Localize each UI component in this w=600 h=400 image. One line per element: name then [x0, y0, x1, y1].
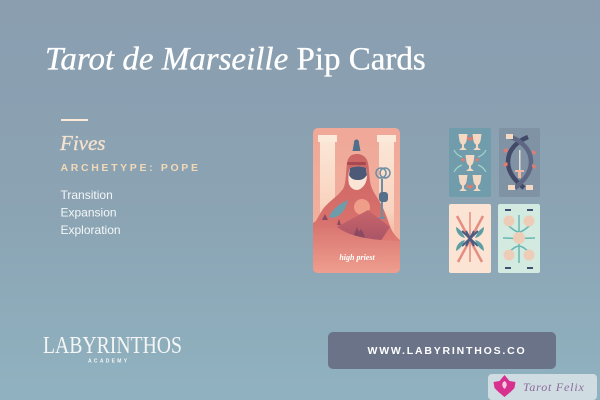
- card label: high priest: [339, 253, 375, 262]
- keyhole ornament: [352, 140, 360, 151]
- face mask and beard: [348, 166, 367, 190]
- text block: fives archetype: Transition: [60, 188, 113, 202]
- trees: [322, 214, 341, 225]
- columns: [318, 135, 396, 242]
- card: cups: [449, 128, 491, 197]
- text block: fives archetype: Exploration: [60, 223, 121, 237]
- card: wands: [449, 204, 491, 273]
- hand: [379, 192, 388, 202]
- watermark: tarot felix: Tarot Felix: [523, 380, 585, 394]
- card: pentacles: [498, 204, 540, 273]
- priest robe: [313, 154, 400, 273]
- hat band: [347, 162, 366, 165]
- card: high priest: [313, 128, 400, 273]
- logo: labyrinthos academy: ACADEMY: [88, 358, 129, 364]
- watermark: tarot felix: [488, 374, 597, 400]
- mountain: [337, 210, 390, 240]
- title: Tarot de Marseille Pip Cards: [45, 42, 426, 78]
- text block: fives archetype: Expansion: [60, 206, 117, 220]
- card: swords: [499, 128, 540, 197]
- sun: [354, 199, 370, 215]
- logo: labyrinthos academy: [43, 332, 182, 364]
- bird: [329, 200, 348, 218]
- text block: fives archetype: [59, 119, 201, 237]
- website button: WWW.LABYRINTHOS.CO: [368, 345, 526, 357]
- castle silhouette: [354, 227, 366, 238]
- logo: labyrinthos academy: LABYRINTHOS: [43, 332, 182, 359]
- text block: fives archetype: ARCHETYPE: POPE: [60, 162, 201, 174]
- key: [376, 168, 390, 218]
- ground: [313, 221, 400, 273]
- text block: fives archetype: Fives: [59, 131, 105, 155]
- website button: [328, 332, 556, 369]
